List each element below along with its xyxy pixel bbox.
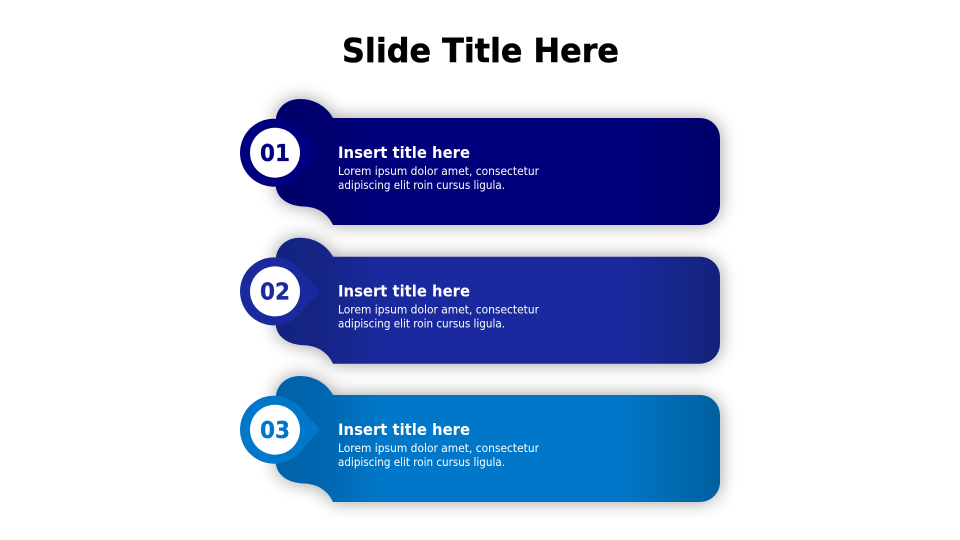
text block 01: Insert title here [338,143,470,162]
icon: number badge 02 [240,257,320,325]
icon: number badge 01 [240,119,320,187]
text block 03: Insert title here [338,420,470,439]
text block 02: Lorem ipsum dolor amet, consectetur [338,303,539,317]
icon: number badge 03: 03 [260,418,290,444]
card shape 02 [276,238,720,364]
text block 02 [338,282,539,331]
icon: number badge 02: 02 [260,280,290,306]
text block 01 [338,143,539,192]
icon: number badge 03 [240,396,320,464]
text block 03: Lorem ipsum dolor amet, consectetur [338,441,539,455]
card shape 03 [276,376,720,502]
text block 02: Insert title here [338,282,470,301]
text block 03 [338,420,539,469]
panel: item 03 [240,376,720,502]
card shape 01 [276,99,720,225]
title: Slide Title Here [342,31,619,70]
icon: number badge 01: 01 [260,141,290,167]
text block 01: Lorem ipsum dolor amet, consectetur [338,164,539,178]
text block 02: adipiscing elit roin cursus ligula. [338,317,505,331]
text block 03: adipiscing elit roin cursus ligula. [338,455,505,469]
text block 01: adipiscing elit roin cursus ligula. [338,178,505,192]
panel: item 01 [240,99,720,225]
panel: item 02 [240,238,720,364]
